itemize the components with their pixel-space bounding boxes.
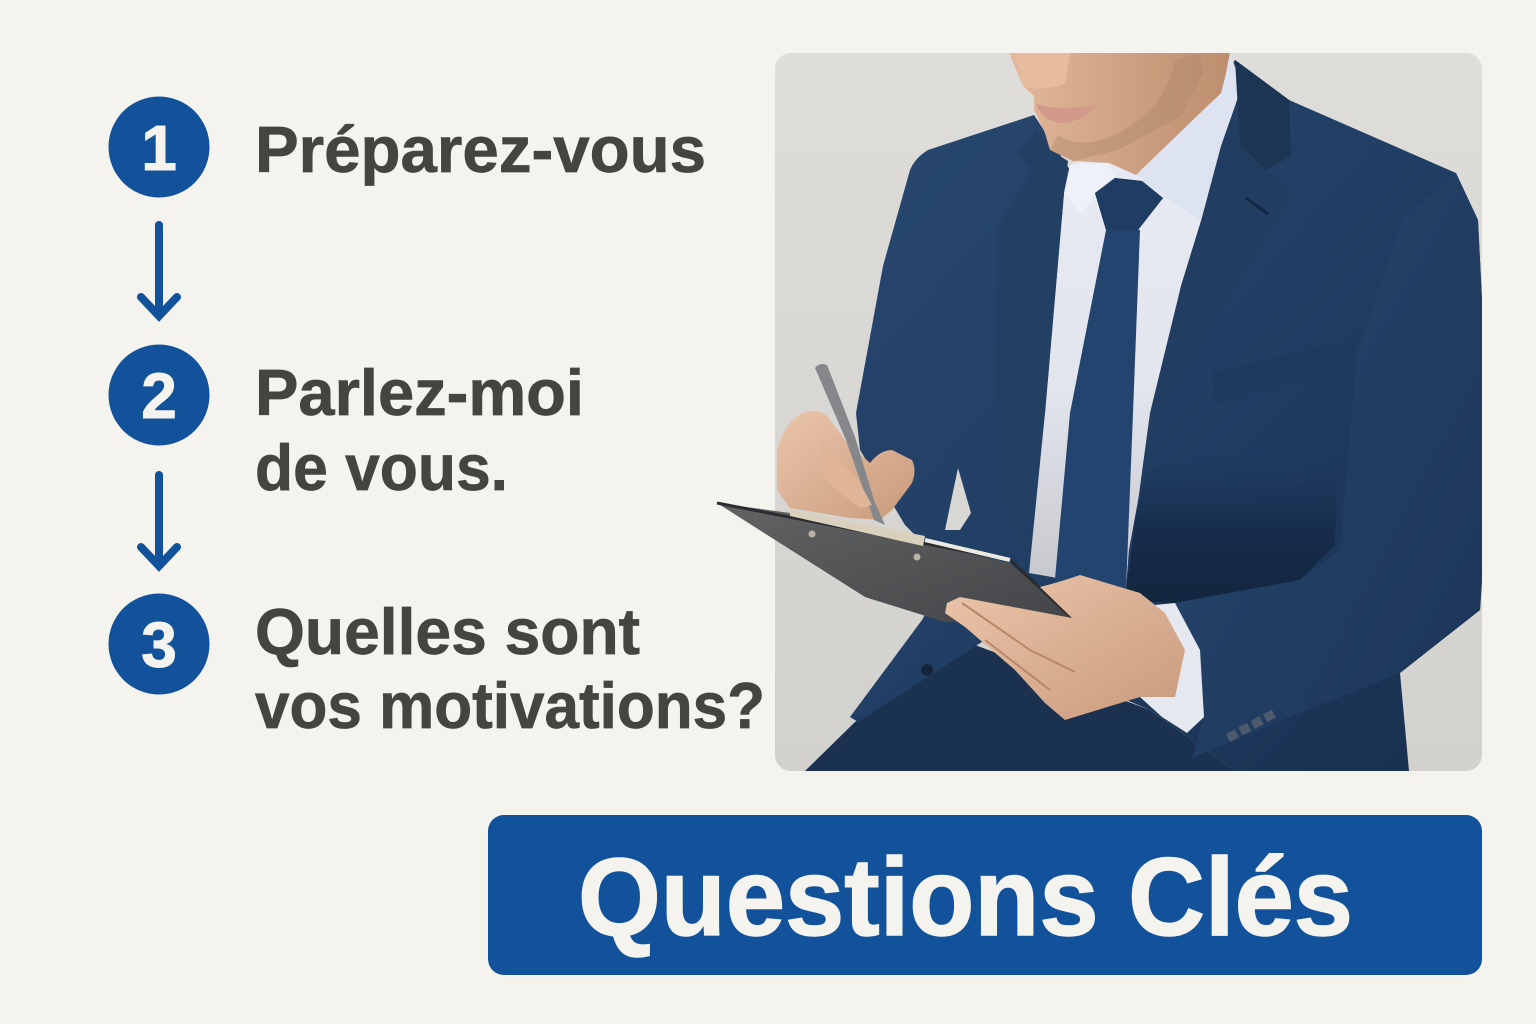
lips	[1036, 104, 1098, 123]
step 3 label: Quelles sont	[255, 595, 640, 668]
nose shadow	[1032, 53, 1070, 88]
step 1 number badge	[108, 96, 210, 198]
step 1 number badge: 1	[141, 112, 177, 184]
clipboard	[717, 503, 1072, 622]
holding hand	[945, 575, 1185, 720]
title text: Questions Clés	[578, 836, 1353, 959]
clip	[790, 509, 925, 546]
jacket button	[921, 664, 933, 676]
writing hand	[777, 411, 914, 520]
step 2 label	[255, 356, 584, 504]
step 3	[108, 594, 765, 742]
breast pocket	[1212, 344, 1338, 404]
neck and face	[1009, 53, 1230, 175]
step 1 label: Préparez-vous	[255, 113, 706, 186]
arrow: step 2 to step 3	[141, 475, 177, 566]
step 2 number badge: 2	[141, 360, 177, 432]
shirt	[1029, 90, 1240, 590]
step 1	[108, 96, 706, 198]
lapel buttonhole	[1246, 198, 1268, 214]
step 3 number badge: 3	[141, 609, 177, 681]
necktie	[1054, 178, 1163, 590]
trousers	[805, 645, 1235, 771]
step 2 number badge	[108, 344, 210, 446]
writing fingers	[820, 440, 872, 508]
suit jacket	[850, 60, 1484, 771]
photo: man in a navy suit writing on a clipboard	[717, 53, 1484, 771]
step 3 label	[255, 595, 765, 742]
step 2	[108, 344, 584, 504]
right lapel	[1126, 60, 1293, 590]
jacket lower shading	[1126, 494, 1336, 603]
shirt collar	[1064, 166, 1096, 214]
stubble shading	[1050, 53, 1203, 161]
arrow: step 1 to step 2	[141, 225, 177, 316]
sleeve buttons	[1228, 713, 1275, 738]
step 3 label: vos motivations?	[255, 669, 765, 742]
background gap beside arm	[945, 468, 971, 530]
pen	[815, 364, 885, 525]
left lapel	[1016, 131, 1068, 416]
step 2 label: de vous.	[255, 431, 508, 504]
step 3 number badge	[108, 594, 210, 694]
title banner	[488, 815, 1482, 975]
step 2 label: Parlez-moi	[255, 356, 584, 429]
right arm sleeve	[1175, 173, 1484, 758]
shirt cuff	[1140, 603, 1204, 733]
